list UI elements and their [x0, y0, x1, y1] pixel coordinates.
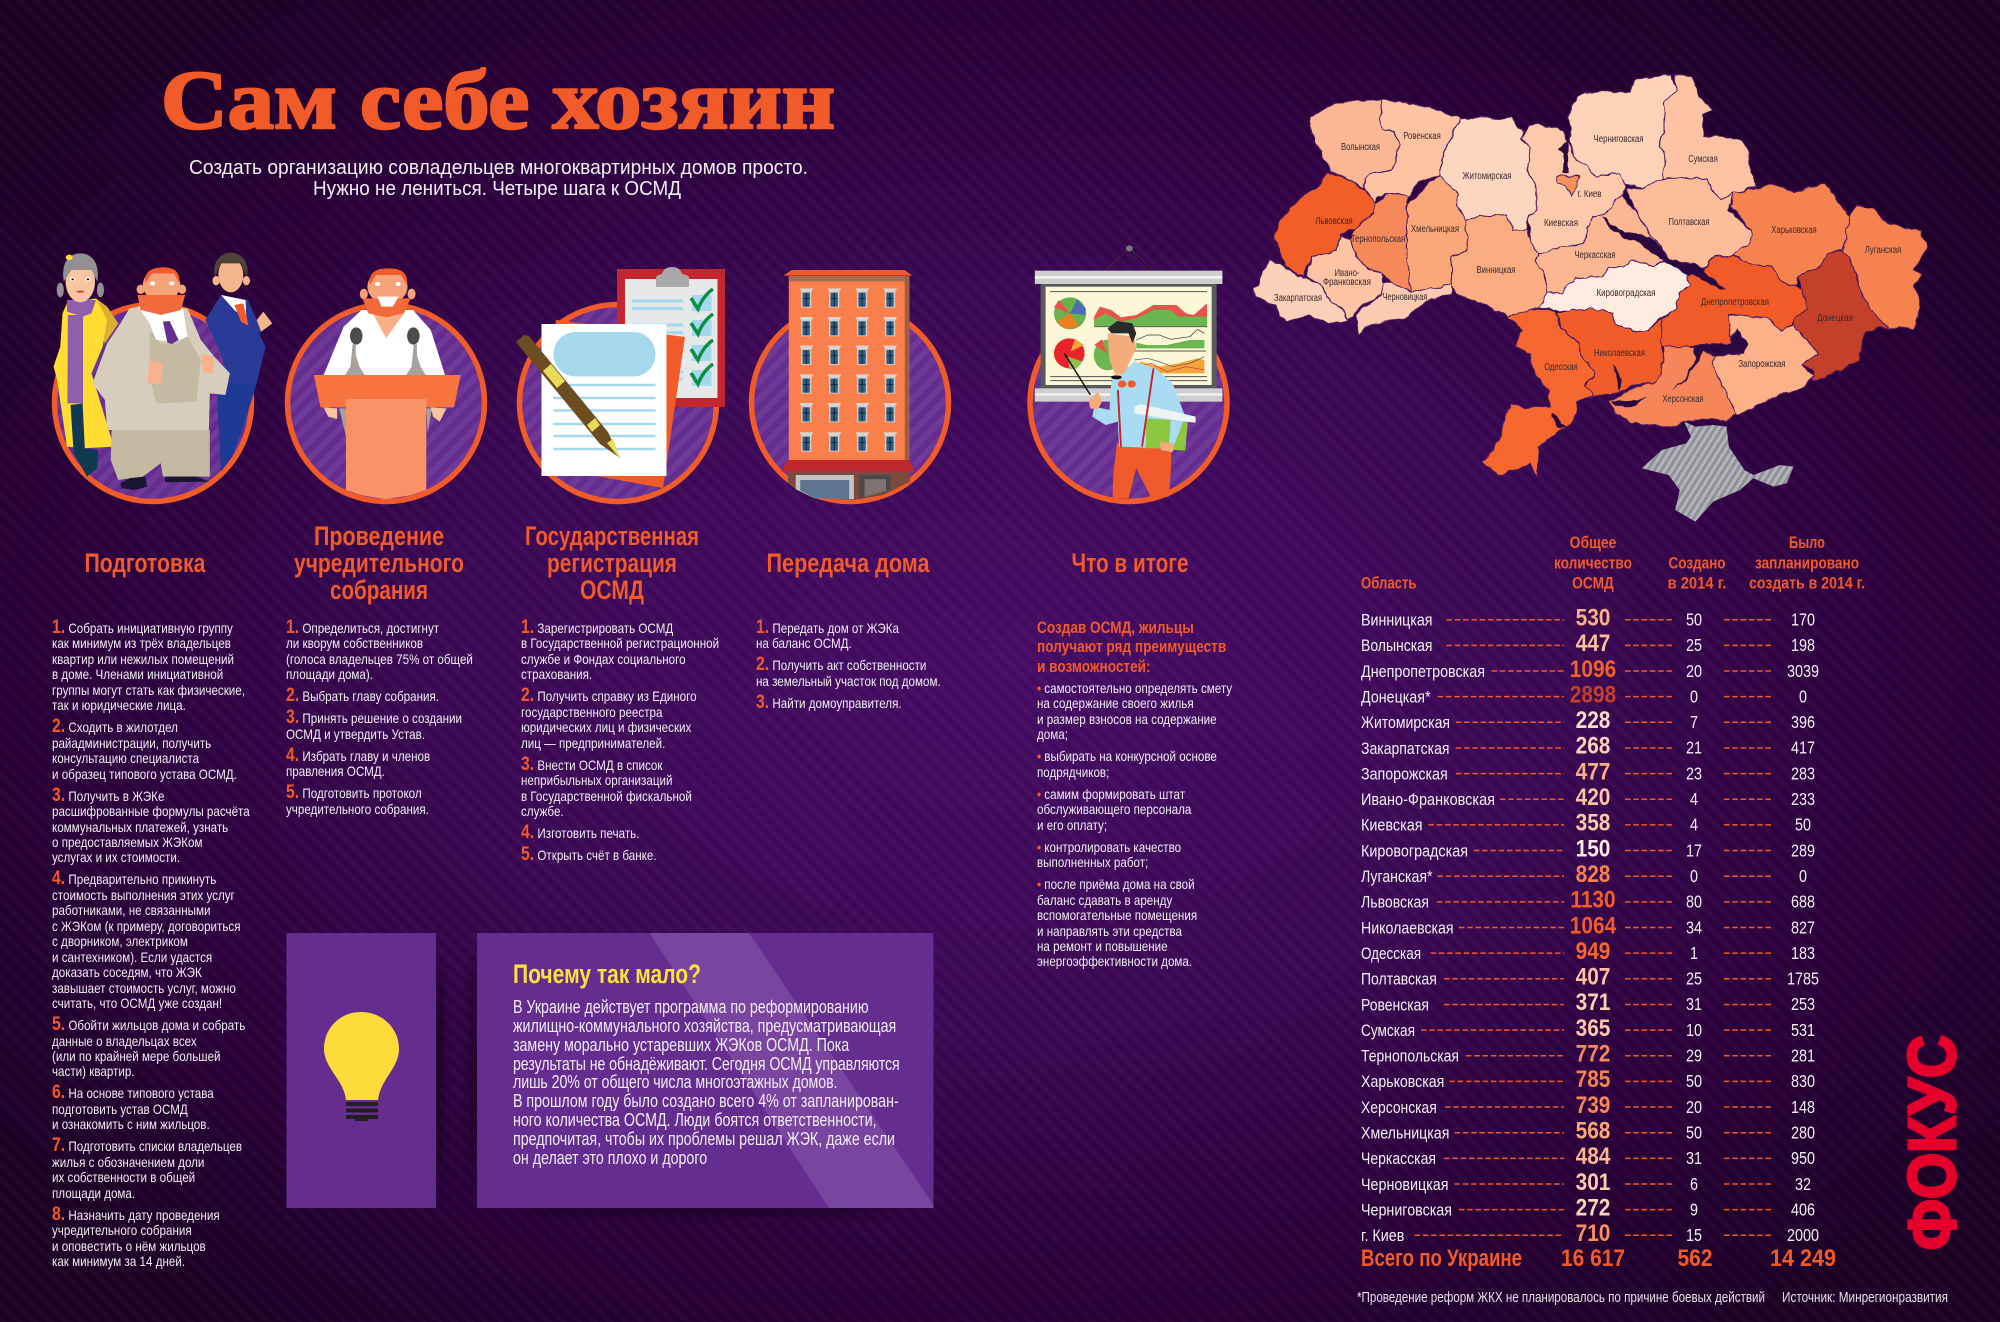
- text: preparation steps: и оповестить о нём жильцов: [52, 1238, 206, 1254]
- text: preparation steps: жилья с обозначением доли: [52, 1154, 204, 1170]
- table headers: запланировано: [1755, 554, 1859, 572]
- region names: Закарпатская: [1361, 740, 1450, 758]
- text: result benefits: дома;: [1037, 726, 1068, 742]
- total OSMD column: 371: [1576, 989, 1610, 1016]
- text: preparation steps: доказать соседям, что ЖЭК: [52, 964, 202, 980]
- region labels: Черниговская: [1594, 134, 1644, 145]
- text: preparation steps: и сантехником). Если удастся: [52, 949, 212, 965]
- panel: light bulb: [286, 933, 436, 1208]
- region names: Ивано-Франковская: [1361, 791, 1495, 809]
- created in 2014 column: [1686, 610, 1702, 1246]
- region labels: Львовская: [1315, 216, 1353, 227]
- step headings: Что в итоге: [1072, 548, 1188, 578]
- step headings: ОСМД: [580, 575, 644, 605]
- created in 2014 column: 50: [1686, 1123, 1702, 1143]
- totals row: [1361, 1245, 1836, 1272]
- text: result benefits: и направлять эти средства: [1037, 923, 1182, 939]
- text: preparation steps: данные о владельцах всех: [52, 1033, 197, 1049]
- text: building transfer steps: [756, 617, 941, 713]
- subtitle: Создать организацию совладельцев многоквартирных домов просто.: [189, 157, 808, 179]
- table headers: ОСМД: [1572, 574, 1614, 592]
- region names: Житомирская: [1361, 714, 1450, 732]
- region names: Сумская: [1361, 1022, 1415, 1040]
- text: why so few body: В прошлом году было создано всего 4% от запланирован-: [513, 1091, 899, 1111]
- region labels: Черновицкая: [1383, 292, 1427, 303]
- planned for 2014 column: 830: [1791, 1072, 1815, 1092]
- text: state registration steps: 1. Зарегистрировать ОСМД: [521, 617, 673, 638]
- region names: Днепропетровская: [1361, 663, 1485, 681]
- table headers: создать в 2014 г.: [1749, 574, 1865, 592]
- text: preparation steps: квартир или нежилых помещений: [52, 651, 234, 667]
- text: result benefits: подрядчиков;: [1037, 764, 1109, 780]
- text: preparation steps: о предоставляемых ЖЭКом: [52, 834, 202, 850]
- text: result benefits: вспомогательные помещения: [1037, 907, 1197, 923]
- icon: registration documents and pen: [516, 267, 725, 502]
- planned for 2014 column: 281: [1791, 1046, 1815, 1066]
- created in 2014 column: 29: [1686, 1046, 1702, 1066]
- text: result benefits: • контролировать качество: [1037, 839, 1181, 855]
- created in 2014 column: 17: [1686, 841, 1702, 861]
- text: why so few body: предпочитая, чтобы их проблемы решал ЖЭК, даже если: [513, 1129, 895, 1149]
- created in 2014 column: 20: [1686, 661, 1702, 681]
- planned for 2014 column: 688: [1791, 892, 1815, 912]
- step headings: регистрация: [547, 548, 677, 578]
- created in 2014 column: 15: [1686, 1226, 1702, 1246]
- planned for 2014 column: 253: [1791, 995, 1815, 1015]
- text: why so few body: лишь 20% от общего числа многоэтажных домов.: [513, 1072, 837, 1092]
- created in 2014 column: 50: [1686, 1072, 1702, 1092]
- region labels: Тернопольская: [1351, 234, 1405, 245]
- text: state registration steps: в Государственной фискальной: [521, 788, 692, 804]
- text: preparation steps: 1. Собрать инициативную группу: [52, 617, 233, 638]
- region names: Черновицкая: [1361, 1176, 1448, 1194]
- planned for 2014 column: 827: [1791, 918, 1815, 938]
- map of Ukraine by region: [1253, 75, 1927, 522]
- region labels: Черкасская: [1574, 250, 1616, 261]
- created in 2014 column: 7: [1690, 713, 1698, 733]
- region labels: Ровенская: [1403, 131, 1441, 142]
- text: result benefits: выполненных работ;: [1037, 854, 1148, 870]
- step headings: Передача дома: [766, 548, 930, 578]
- text: result benefits: на ремонт и повышение: [1037, 938, 1168, 954]
- text: preparation steps: коммунальных платежей, узнать: [52, 819, 228, 835]
- total OSMD column: 1064: [1570, 912, 1617, 939]
- total OSMD column: 710: [1576, 1220, 1610, 1246]
- text: preparation steps: (или по крайней мере большей: [52, 1048, 221, 1064]
- text: why so few body: замену морально устаревших ЖЭКов ОСМД. Пока: [513, 1035, 849, 1055]
- region labels: Херсонская: [1662, 394, 1704, 405]
- text: founding meeting steps: 5. Подготовить протокол: [286, 782, 422, 803]
- text: preparation steps: [52, 617, 250, 1269]
- total OSMD column: 447: [1576, 630, 1610, 656]
- created in 2014 column: 0: [1690, 867, 1698, 886]
- icon: three residents in a circle: [54, 253, 272, 502]
- region names: Полтавская: [1361, 971, 1437, 989]
- region names: [1361, 612, 1495, 1245]
- table headers: в 2014 г.: [1668, 574, 1726, 592]
- text: why so few body: результаты не обнадёживают. Сегодня ОСМД управляются: [513, 1054, 900, 1074]
- total OSMD column: 407: [1576, 963, 1610, 990]
- panel: why so few: [477, 933, 934, 1208]
- totals row: 16 617: [1561, 1245, 1625, 1272]
- text: result benefits: энергоэффективности дома.: [1037, 953, 1192, 969]
- created in 2014 column: 31: [1686, 1149, 1702, 1169]
- region names: Львовская: [1361, 894, 1429, 912]
- planned for 2014 column: 283: [1791, 764, 1815, 784]
- total OSMD column: 1130: [1570, 886, 1616, 913]
- text: state registration steps: 2. Получить справку из Единого: [521, 685, 697, 706]
- text: preparation steps: части) квартир.: [52, 1063, 135, 1079]
- subtitle: [189, 157, 808, 200]
- text: preparation steps: как минимум за 14 дней.: [52, 1253, 185, 1269]
- step headings: Государственная: [525, 521, 699, 551]
- text: preparation steps: райадминистрации, получить: [52, 735, 211, 751]
- planned for 2014 column: 417: [1791, 738, 1815, 758]
- region labels: Хмельницкая: [1411, 224, 1459, 235]
- text: preparation steps: стоимость выполнения этих услуг: [52, 887, 235, 903]
- total OSMD column: 1096: [1570, 655, 1616, 682]
- region labels: Луганская: [1865, 245, 1901, 256]
- icon: speaker at a podium in a circle: [288, 268, 484, 502]
- text: founding meeting steps: правления ОСМД.: [286, 763, 385, 779]
- totals row: 562: [1678, 1245, 1712, 1272]
- table headers: Было: [1789, 533, 1825, 552]
- icon: apartment building: [752, 270, 948, 502]
- text: why so few body: жилищно-коммунального хозяйства, предусматривающая: [513, 1016, 896, 1036]
- text: state registration steps: юридических лиц и физических: [521, 719, 691, 735]
- total OSMD column: 228: [1576, 707, 1610, 733]
- planned for 2014 column: 3039: [1787, 661, 1819, 681]
- text: preparation steps: с ЖЭКом (к примеру, договориться: [52, 918, 241, 934]
- text: preparation steps: 5. Обойти жильцов дома и собрать: [52, 1014, 245, 1035]
- text: founding meeting steps: ОСМД и утвердить Устав.: [286, 726, 425, 742]
- text: founding meeting steps: площади дома).: [286, 666, 373, 682]
- text: preparation steps: и ознакомить с ним жильцов.: [52, 1116, 210, 1132]
- total OSMD column: 568: [1576, 1117, 1610, 1144]
- text: result benefits: обслуживающего персонала: [1037, 801, 1191, 817]
- text: result lead: [1037, 618, 1226, 676]
- created in 2014 column: 9: [1690, 1200, 1698, 1220]
- text: preparation steps: группы могут стать как физические,: [52, 682, 245, 698]
- total OSMD column: 272: [1576, 1194, 1610, 1221]
- region labels: г. Киев: [1578, 189, 1602, 200]
- text: state registration steps: службе и Фондах социального: [521, 651, 686, 667]
- logo: Focus: ФОКУС: [1895, 1035, 1970, 1250]
- created in 2014 column: 21: [1686, 738, 1702, 758]
- text: state registration steps: 5. Открыть счёт в банке.: [521, 844, 657, 865]
- text: result benefits: [1037, 680, 1232, 969]
- table headers: Область: [1361, 574, 1416, 592]
- planned for 2014 column: 531: [1791, 1020, 1815, 1040]
- region names: Хмельницкая: [1361, 1124, 1449, 1142]
- text: founding meeting steps: 4. Избрать главу и членов: [286, 745, 430, 766]
- text: state registration steps: 3. Внести ОСМД в список: [521, 754, 662, 775]
- text: preparation steps: 4. Предварительно прикинуть: [52, 868, 216, 889]
- text: founding meeting steps: 2. Выбрать главу собрания.: [286, 685, 439, 706]
- planned for 2014 column: 2000: [1787, 1226, 1819, 1246]
- region names: Донецкая*: [1361, 688, 1431, 706]
- region labels: Кировоградская: [1596, 288, 1656, 299]
- total OSMD column: 772: [1576, 1040, 1610, 1067]
- planned for 2014 column: 148: [1791, 1097, 1815, 1117]
- total OSMD column: 420: [1576, 784, 1610, 810]
- region labels: Житомирская: [1462, 171, 1512, 182]
- text: why so few body: В Украине действует программа по реформированию: [513, 997, 869, 1017]
- text: preparation steps: 8. Назначить дату проведения: [52, 1204, 220, 1225]
- step headings: [84, 521, 1188, 605]
- total OSMD column: 484: [1576, 1143, 1611, 1169]
- planned for 2014 column: 183: [1791, 943, 1815, 963]
- region labels: Ивано-: [1334, 268, 1360, 279]
- text: preparation steps: услугах и их стоимости.: [52, 849, 180, 865]
- text: preparation steps: консультацию специалиста: [52, 750, 199, 766]
- region names: Кировоградская: [1361, 842, 1468, 860]
- text: preparation steps: расшифрованные формулы расчёта: [52, 803, 250, 819]
- region names: Ровенская: [1361, 996, 1429, 1014]
- text: result benefits: на содержание своего жилья: [1037, 695, 1194, 711]
- total OSMD column: 949: [1576, 938, 1610, 964]
- dashed leaders: [1414, 620, 1771, 1235]
- region names: Киевская: [1361, 817, 1422, 835]
- region names: Запорожская: [1361, 765, 1448, 783]
- text: preparation steps: и образец типового устава ОСМД.: [52, 766, 237, 782]
- created in 2014 column: 0: [1690, 687, 1698, 707]
- planned for 2014 column: 289: [1791, 841, 1815, 861]
- text: founding meeting steps: [286, 617, 473, 817]
- text: state registration steps: государственного реестра: [521, 704, 662, 720]
- text: founding meeting steps: (голоса владельцев 75% от общей: [286, 651, 473, 667]
- total OSMD column: [1570, 604, 1617, 1246]
- text: building transfer steps: на земельный участок под домом.: [756, 673, 941, 689]
- planned for 2014 column: 0: [1799, 867, 1807, 886]
- text: preparation steps: с дворником, электриком: [52, 933, 188, 949]
- created in 2014 column: 10: [1686, 1020, 1702, 1040]
- text: state registration steps: [521, 617, 719, 865]
- planned for 2014 column: 233: [1791, 790, 1815, 809]
- total OSMD column: 365: [1576, 1015, 1610, 1041]
- text: result benefits: и его оплату;: [1037, 817, 1107, 833]
- text: state registration steps: страхования.: [521, 666, 592, 682]
- planned for 2014 column: 32: [1795, 1174, 1811, 1194]
- text: why so few body: ного количества ОСМД. Люди боятся ответственности,: [513, 1110, 877, 1130]
- text: founding meeting steps: учредительного собрания.: [286, 801, 429, 817]
- created in 2014 column: 23: [1686, 764, 1702, 784]
- planned for 2014 column: 0: [1799, 687, 1807, 707]
- region labels: Запорожская: [1738, 359, 1786, 370]
- text: result lead: и возможностей:: [1037, 657, 1151, 676]
- created in 2014 column: 4: [1690, 790, 1698, 809]
- planned for 2014 column: 406: [1791, 1200, 1815, 1220]
- step headings: Подготовка: [84, 548, 206, 578]
- text: result benefits: и размер взносов на содержание: [1037, 711, 1217, 727]
- total OSMD column: 2898: [1570, 681, 1616, 708]
- text: building transfer steps: 2. Получить акт собственности: [756, 654, 926, 675]
- panel heading: Почему так мало?: [513, 959, 701, 989]
- text: preparation steps: как минимум из трёх владельцев: [52, 635, 231, 651]
- footnote and source: Источник: Минрегионразвития: [1782, 1289, 1948, 1306]
- region names: Черкасская: [1361, 1150, 1436, 1168]
- region labels: Днепропетровская: [1701, 297, 1769, 308]
- region labels: Киевская: [1544, 218, 1578, 229]
- step headings: собрания: [330, 575, 428, 605]
- region labels: Одесская: [1544, 362, 1578, 373]
- table headers: Создано: [1668, 554, 1726, 572]
- text: state registration steps: службе.: [521, 803, 564, 819]
- text: building transfer steps: 1. Передать дом от ЖЭКа: [756, 617, 899, 638]
- region labels: Сумская: [1688, 154, 1718, 165]
- text: state registration steps: лиц — предпринимателей.: [521, 735, 665, 751]
- text: building transfer steps: 3. Найти домоуправителя.: [756, 692, 902, 713]
- created in 2014 column: 4: [1690, 815, 1698, 835]
- Crimea: [1642, 422, 1794, 522]
- region names: Николаевская: [1361, 919, 1454, 937]
- text: why so few body: он делает это плохо и дорого: [513, 1148, 707, 1168]
- text: preparation steps: их собственности в общей: [52, 1169, 195, 1185]
- text: result lead: получают ряд преимуществ: [1037, 637, 1226, 656]
- region labels: Донецкая: [1817, 313, 1853, 324]
- planned for 2014 column: [1787, 610, 1819, 1246]
- text: preparation steps: считать, что ОСМД уже создан!: [52, 995, 222, 1011]
- region names: Одесская: [1361, 945, 1421, 963]
- total OSMD column: 268: [1576, 732, 1610, 759]
- table headers: количество: [1554, 554, 1632, 572]
- region names: Харьковская: [1361, 1073, 1444, 1091]
- text: why so few body: [513, 997, 900, 1168]
- text: preparation steps: завышает стоимость услуг, можно: [52, 980, 236, 996]
- created in 2014 column: 34: [1686, 918, 1702, 938]
- text: building transfer steps: на баланс ОСМД.: [756, 635, 852, 651]
- text: founding meeting steps: 3. Принять решение о создании: [286, 707, 462, 728]
- table headers: [1361, 533, 1865, 592]
- region names: Луганская*: [1361, 868, 1433, 886]
- region labels: Франковская: [1323, 277, 1371, 288]
- text: preparation steps: площади дома.: [52, 1185, 135, 1201]
- region names: Херсонская: [1361, 1099, 1437, 1117]
- region names: Тернопольская: [1361, 1048, 1459, 1066]
- planned for 2014 column: 1785: [1787, 969, 1819, 989]
- text: result benefits: • после приёма дома на свой: [1037, 876, 1195, 892]
- region labels: Харьковская: [1771, 225, 1817, 236]
- total OSMD column: 477: [1576, 758, 1610, 785]
- text: state registration steps: 4. Изготовить печать.: [521, 822, 639, 843]
- text: preparation steps: учредительного собрания: [52, 1222, 192, 1238]
- created in 2014 column: 1: [1690, 943, 1698, 963]
- icon: presenter and chart board: [1030, 245, 1227, 501]
- region names: Черниговская: [1361, 1201, 1452, 1219]
- region labels: Закарпатская: [1274, 293, 1322, 304]
- region labels: Полтавская: [1668, 217, 1710, 228]
- text: preparation steps: в доме. Членами инициативной: [52, 666, 223, 682]
- step headings: учредительного: [294, 548, 464, 578]
- table headers: Общее: [1570, 533, 1616, 552]
- created in 2014 column: 50: [1686, 610, 1702, 630]
- text: preparation steps: 3. Получить в ЖЭКе: [52, 785, 164, 806]
- region names: г. Киев: [1361, 1227, 1404, 1245]
- text: founding meeting steps: 1. Определиться, достигнут: [286, 617, 439, 638]
- total OSMD column: 739: [1576, 1092, 1610, 1118]
- created in 2014 column: 31: [1686, 995, 1702, 1015]
- totals row: Всего по Украине: [1361, 1245, 1522, 1272]
- planned for 2014 column: 280: [1791, 1123, 1815, 1143]
- total OSMD column: 150: [1576, 835, 1610, 862]
- region labels: Винницкая: [1476, 265, 1516, 276]
- text: result benefits: • самим формировать штат: [1037, 786, 1185, 802]
- icon: light bulb: [324, 1012, 399, 1121]
- planned for 2014 column: 396: [1791, 713, 1815, 733]
- text: preparation steps: 7. Подготовить списки владельцев: [52, 1135, 242, 1156]
- planned for 2014 column: 198: [1791, 636, 1815, 656]
- panel shadows: [433, 960, 895, 1216]
- planned for 2014 column: 950: [1791, 1149, 1815, 1169]
- region names: Винницкая: [1361, 612, 1432, 630]
- planned for 2014 column: 50: [1795, 815, 1811, 835]
- text: result benefits: • выбирать на конкурсной основе: [1037, 748, 1217, 764]
- region labels: Николаевская: [1594, 348, 1645, 359]
- text: preparation steps: 2. Сходить в жилотдел: [52, 716, 178, 737]
- text: preparation steps: так и юридические лица.: [52, 697, 186, 713]
- totals row: 14 249: [1770, 1245, 1836, 1272]
- region names: Волынская: [1361, 637, 1432, 655]
- data table: [1361, 533, 1865, 1272]
- text: state registration steps: неприбыльных организаций: [521, 772, 672, 788]
- text: result benefits: баланс сдавать в аренду: [1037, 892, 1172, 908]
- created in 2014 column: 25: [1686, 969, 1702, 989]
- region labels: Волынская: [1341, 142, 1380, 153]
- text: preparation steps: подготовить устав ОСМД: [52, 1101, 188, 1117]
- total OSMD column: 785: [1576, 1066, 1610, 1093]
- created in 2014 column: 80: [1686, 892, 1702, 912]
- title: Сам себе хозяин: [161, 54, 835, 147]
- text: state registration steps: в Государственной регистрационной: [521, 635, 719, 651]
- total OSMD column: 828: [1576, 861, 1610, 887]
- text: result benefits: • самостоятельно определять смету: [1037, 680, 1232, 696]
- created in 2014 column: 25: [1686, 636, 1702, 656]
- created in 2014 column: 6: [1690, 1174, 1698, 1194]
- total OSMD column: 301: [1576, 1168, 1610, 1195]
- total OSMD column: 530: [1576, 604, 1610, 631]
- footnote and source: *Проведение реформ ЖКХ не планировалось по причине боевых действий: [1357, 1289, 1765, 1306]
- text: preparation steps: работниками, не связанными: [52, 902, 210, 918]
- planned for 2014 column: 170: [1791, 610, 1815, 630]
- text: founding meeting steps: ли кворум собственников: [286, 635, 423, 651]
- text: result lead: Создав ОСМД, жильцы: [1037, 618, 1194, 637]
- step headings: Проведение: [314, 521, 444, 551]
- subtitle: Нужно не лениться. Четыре шага к ОСМД: [313, 178, 681, 200]
- total OSMD column: 358: [1576, 809, 1610, 836]
- region labels: [1274, 131, 1901, 405]
- text: preparation steps: 6. На основе типового устава: [52, 1082, 214, 1103]
- created in 2014 column: 20: [1686, 1097, 1702, 1117]
